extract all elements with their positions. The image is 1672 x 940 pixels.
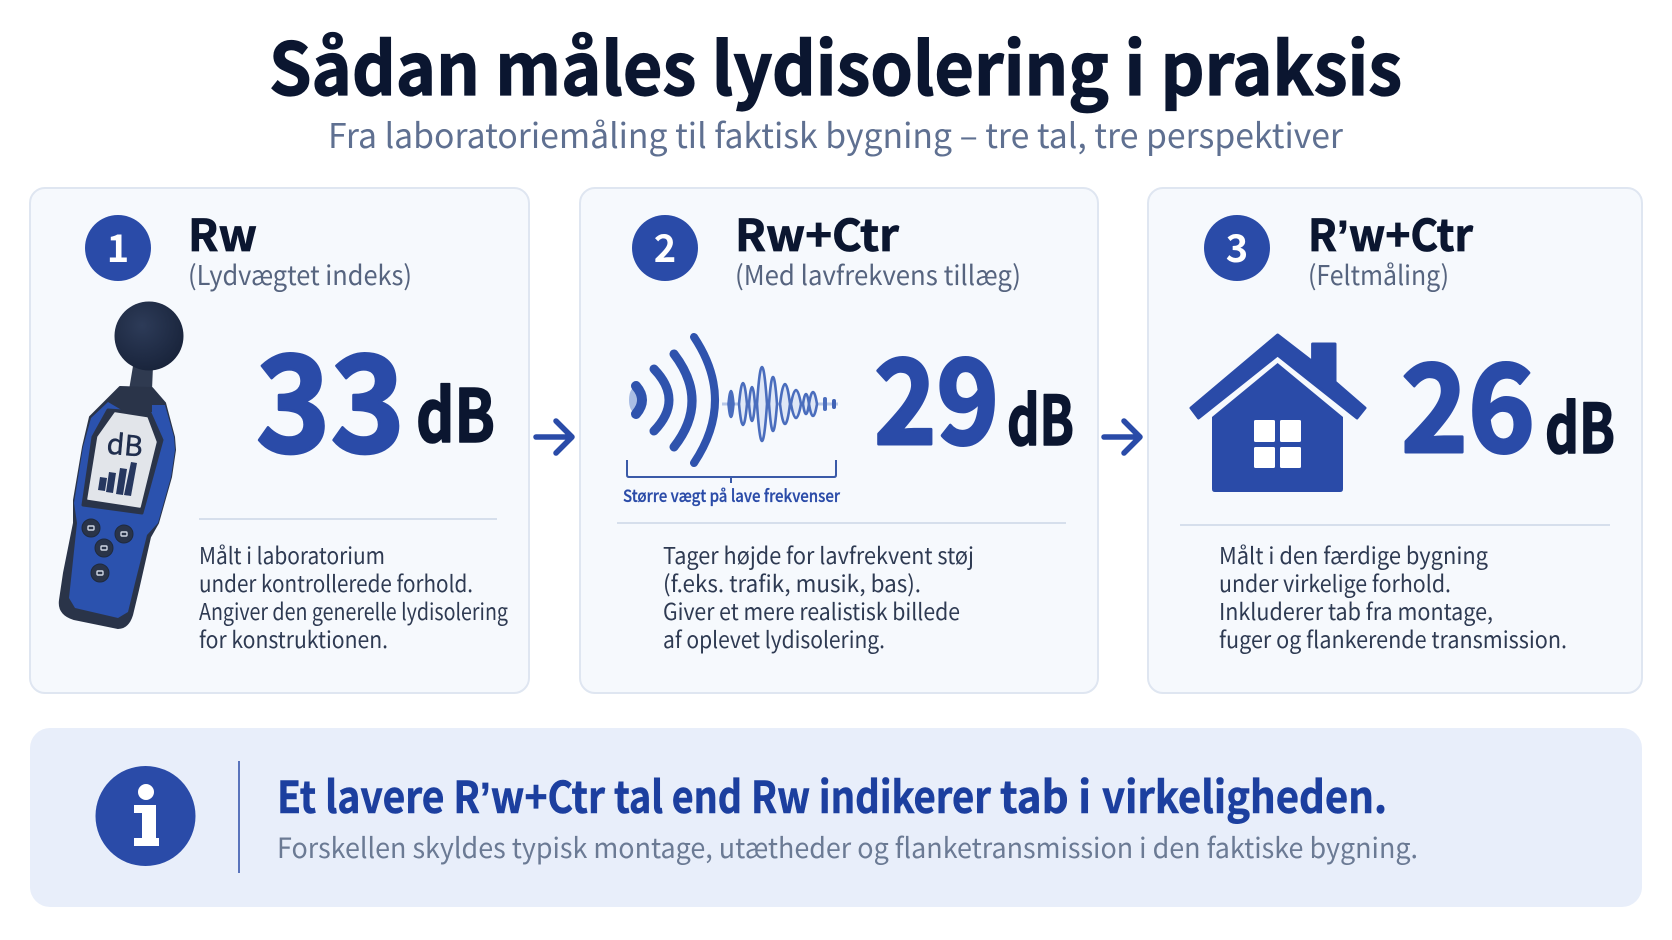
subheading: Med lavfrekvens tillæg: (Med lavfrekvens tillæg) xyxy=(735,254,1021,293)
description: Tager højde for lavfrekvent støj xyxy=(663,537,974,571)
value: 26 dB: 26 xyxy=(1401,311,1535,488)
step badge 3: 3 xyxy=(1226,218,1248,273)
waveform xyxy=(728,367,836,441)
description: under kontrollerede forhold. xyxy=(199,565,473,599)
description: Målt i laboratorium xyxy=(199,537,385,571)
description: Angiver den generelle lydisolering xyxy=(199,593,508,627)
subtitle: Fra laboratoriemåling til faktisk bygning – tre tal, tre perspektiver xyxy=(328,109,1344,158)
panel: Rw xyxy=(30,188,529,693)
value: 33 dB xyxy=(256,297,495,491)
panel: R'w+Ctr xyxy=(1148,188,1642,693)
step badge 3 xyxy=(1204,215,1270,281)
arrow 2 to 3 xyxy=(1104,421,1140,453)
title: Sådan måles lydisolering i praksis xyxy=(269,11,1402,116)
icon: info xyxy=(96,766,196,866)
icon: house xyxy=(1191,335,1365,492)
value: 33 dB: 33 xyxy=(256,297,405,491)
description: fuger og flankerende transmission. xyxy=(1219,621,1567,655)
key message xyxy=(277,762,1387,826)
value: 33 dB: dB xyxy=(416,358,495,464)
arrow 1 to 2 xyxy=(536,421,572,453)
icon: sound level meter: dB xyxy=(105,423,145,466)
meter buttons xyxy=(82,519,133,582)
panel: conclusion banner xyxy=(30,728,1642,907)
bracket xyxy=(627,460,836,483)
screen bars xyxy=(98,462,137,496)
description: Giver et mere realistisk billede xyxy=(663,593,960,627)
description: Målt i den færdige bygning xyxy=(1219,537,1488,571)
key message: Et lavere R’w+Ctr xyxy=(277,762,606,826)
step badge 2: 2 xyxy=(654,218,676,273)
heading: Rw+Ctr: Rw+Ctr xyxy=(735,200,900,264)
subheading: Feltmåling: (Feltmåling) xyxy=(1308,254,1449,293)
panel: Rw+Ctr xyxy=(580,188,1098,693)
value: 29 dB: dB xyxy=(1007,366,1074,465)
description: Inkluderer tab fra montage, xyxy=(1219,593,1493,627)
key message: Rw indikerer xyxy=(751,762,992,826)
step badge 1: 1 xyxy=(107,218,129,273)
subheading: Lydvægtet indeks: (Lydvægtet indeks) xyxy=(188,254,412,293)
bracket label: Større vægt på lave frekvenser xyxy=(623,482,840,507)
key message: tab i xyxy=(1000,762,1091,826)
step badge 2 xyxy=(632,215,698,281)
heading: Rw: Rw xyxy=(188,200,257,264)
key message: tal end xyxy=(614,762,742,826)
description: for konstruktionen. xyxy=(199,621,388,655)
icon: sound level meter xyxy=(60,302,184,628)
description xyxy=(199,537,508,655)
value: 29 dB xyxy=(874,307,1074,478)
description xyxy=(663,537,974,655)
supporting text: Forskellen skyldes typisk montage, utætheder og flanketransmission i den faktiske bygning. xyxy=(277,827,1418,867)
icon: sound waves xyxy=(627,337,838,483)
value: 26 dB: dB xyxy=(1545,374,1615,473)
key message: virkeligheden. xyxy=(1102,762,1387,826)
heading: R'w+Ctr: R’w+Ctr xyxy=(1308,200,1474,264)
description: af oplevet lydisolering. xyxy=(663,621,885,655)
value: 26 dB xyxy=(1401,311,1615,488)
description xyxy=(1219,537,1567,655)
description: under virkelige forhold. xyxy=(1219,565,1451,599)
value: 29 dB: 29 xyxy=(874,307,999,478)
description: (f.eks. trafik, musik, bas). xyxy=(663,565,921,599)
step badge 1 xyxy=(85,215,151,281)
